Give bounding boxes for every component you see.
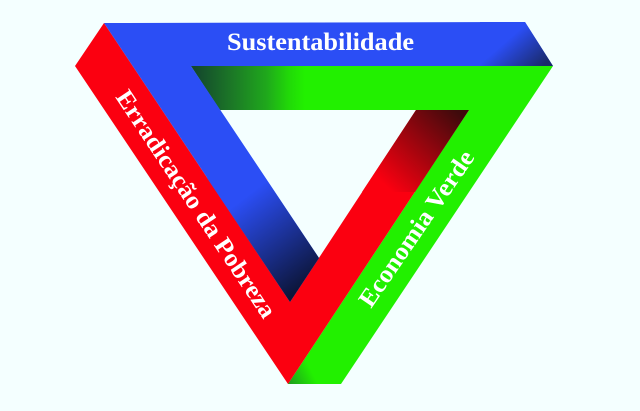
label: Economia Verde: Economia Verde [354,145,480,312]
panel: green band, Economia Verde [191,66,553,384]
label: Erradicação da Pobreza: Erradicação da Pobreza [110,85,281,324]
label: Sustentabilidade: Sustentabilidade [227,29,414,56]
panel: red band, Erradicação da Pobreza [75,23,469,384]
panel: blue band, Sustentabilidade [104,22,553,302]
